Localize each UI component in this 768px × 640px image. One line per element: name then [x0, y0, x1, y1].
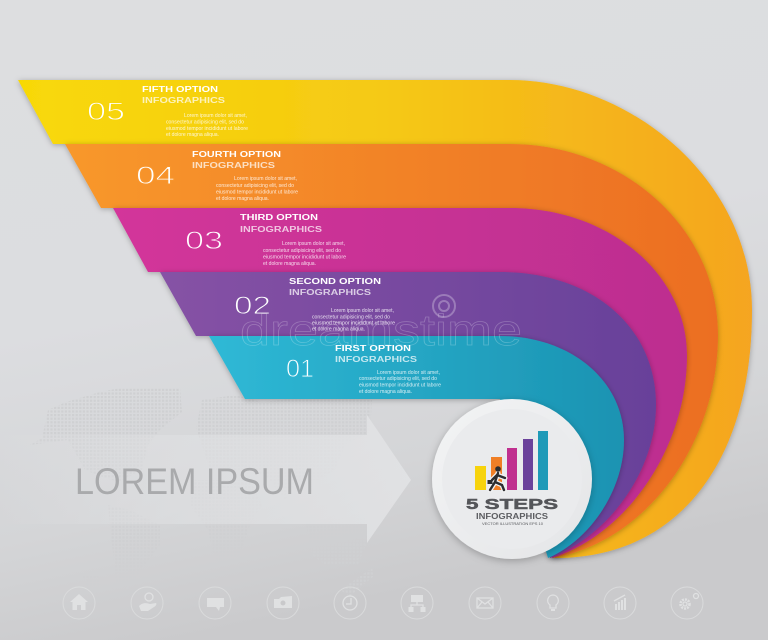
heading third option: INFOGRAPHICS [240, 224, 322, 234]
heading first option: FIRST OPTION [335, 343, 411, 353]
icon row [63, 587, 703, 619]
heading fourth option: FOURTH OPTION [192, 149, 281, 159]
heading fourth option: INFOGRAPHICS [192, 160, 275, 170]
watermark: dreamstime [240, 306, 522, 355]
band 3: magenta [113, 208, 687, 558]
body text 1: eiusmod tempor incididunt ut labore [359, 382, 441, 388]
icon: growth chart [604, 587, 636, 619]
body text 2: et dolore magna aliqua. [312, 326, 365, 332]
center badge [432, 399, 592, 559]
number 01: 01 [286, 355, 314, 383]
icon: banknote [267, 587, 299, 619]
number 04: 04 [136, 162, 175, 190]
badge subtitle: INFOGRAPHICS [476, 512, 549, 521]
lorem ipsum heading: LOREM IPSUM [75, 461, 314, 502]
arrow [0, 415, 411, 543]
body text 4: eiusmod tempor incididunt ut labore [216, 190, 298, 196]
heading second option: SECOND OPTION [289, 276, 381, 286]
band 5: yellow [18, 80, 752, 558]
icon: clock [334, 587, 366, 619]
badge title: 5 STEPS [466, 496, 558, 513]
heading second option: INFOGRAPHICS [289, 287, 371, 297]
heading fifth option [142, 84, 225, 105]
heading second option [289, 276, 381, 297]
icon: light bulb [537, 587, 569, 619]
body text 1: consectetur adipisicing elit, sed do [359, 376, 437, 382]
number 05: 05 [87, 98, 125, 126]
body text 4: Lorem ipsum dolor sit amet, [234, 176, 297, 182]
body text 3: et dolore magna aliqua. [263, 261, 316, 267]
body text 4: consectetur adipisicing elit, sed do [216, 183, 294, 189]
bar chart icon [475, 431, 548, 490]
heading third option: THIRD OPTION [240, 212, 318, 222]
watermark [240, 295, 522, 355]
icon: envelope [469, 587, 501, 619]
body text 5: et dolore magna aliqua. [166, 132, 219, 138]
band 1: teal [209, 336, 624, 558]
heading fifth option: FIFTH OPTION [142, 84, 218, 94]
band 2: purple [160, 272, 656, 558]
body text 2: Lorem ipsum dolor sit amet, [331, 308, 394, 314]
heading fifth option: INFOGRAPHICS [142, 95, 225, 105]
body text 2 [312, 308, 395, 332]
body text 1: et dolore magna aliqua. [359, 389, 412, 395]
body text 1 [359, 370, 441, 395]
icon: running businessman [488, 466, 505, 490]
heading first option [335, 343, 417, 364]
body text 2: consectetur adipisicing elit, sed do [312, 314, 390, 320]
body text 3 [263, 241, 346, 267]
dotted world map [32, 389, 333, 444]
body text 5: Lorem ipsum dolor sit amet, [184, 113, 247, 119]
icon: gears [671, 587, 703, 619]
icon: speech bubble [199, 587, 231, 619]
body text 3: eiusmod tempor incididunt ut labore [263, 254, 346, 260]
body text 5: consectetur adipisicing elit, sed do [166, 120, 244, 126]
body text 5 [166, 113, 248, 138]
body text 5: eiusmod tempor incididunt ut labore [166, 126, 248, 132]
icon: org chart [401, 587, 433, 619]
body text 4: et dolore magna aliqua. [216, 196, 269, 202]
body text 3: consectetur adipisicing elit, sed do [263, 248, 341, 254]
badge caption: VECTOR ILLUSTRATION EPS 10 [482, 522, 543, 526]
body text 1: Lorem ipsum dolor sit amet, [377, 370, 440, 376]
body text 2: eiusmod tempor incididunt ut labore [312, 320, 395, 326]
number 02: 02 [234, 292, 271, 320]
heading third option [240, 212, 322, 234]
heading fourth option [192, 149, 281, 170]
body text 3: Lorem ipsum dolor sit amet, [282, 241, 345, 247]
icon: home [63, 587, 95, 619]
band 4: orange [65, 144, 718, 558]
icon: hand with coin [131, 587, 163, 619]
body text 4 [216, 176, 298, 202]
heading first option: INFOGRAPHICS [335, 354, 417, 364]
number 03: 03 [185, 227, 223, 255]
